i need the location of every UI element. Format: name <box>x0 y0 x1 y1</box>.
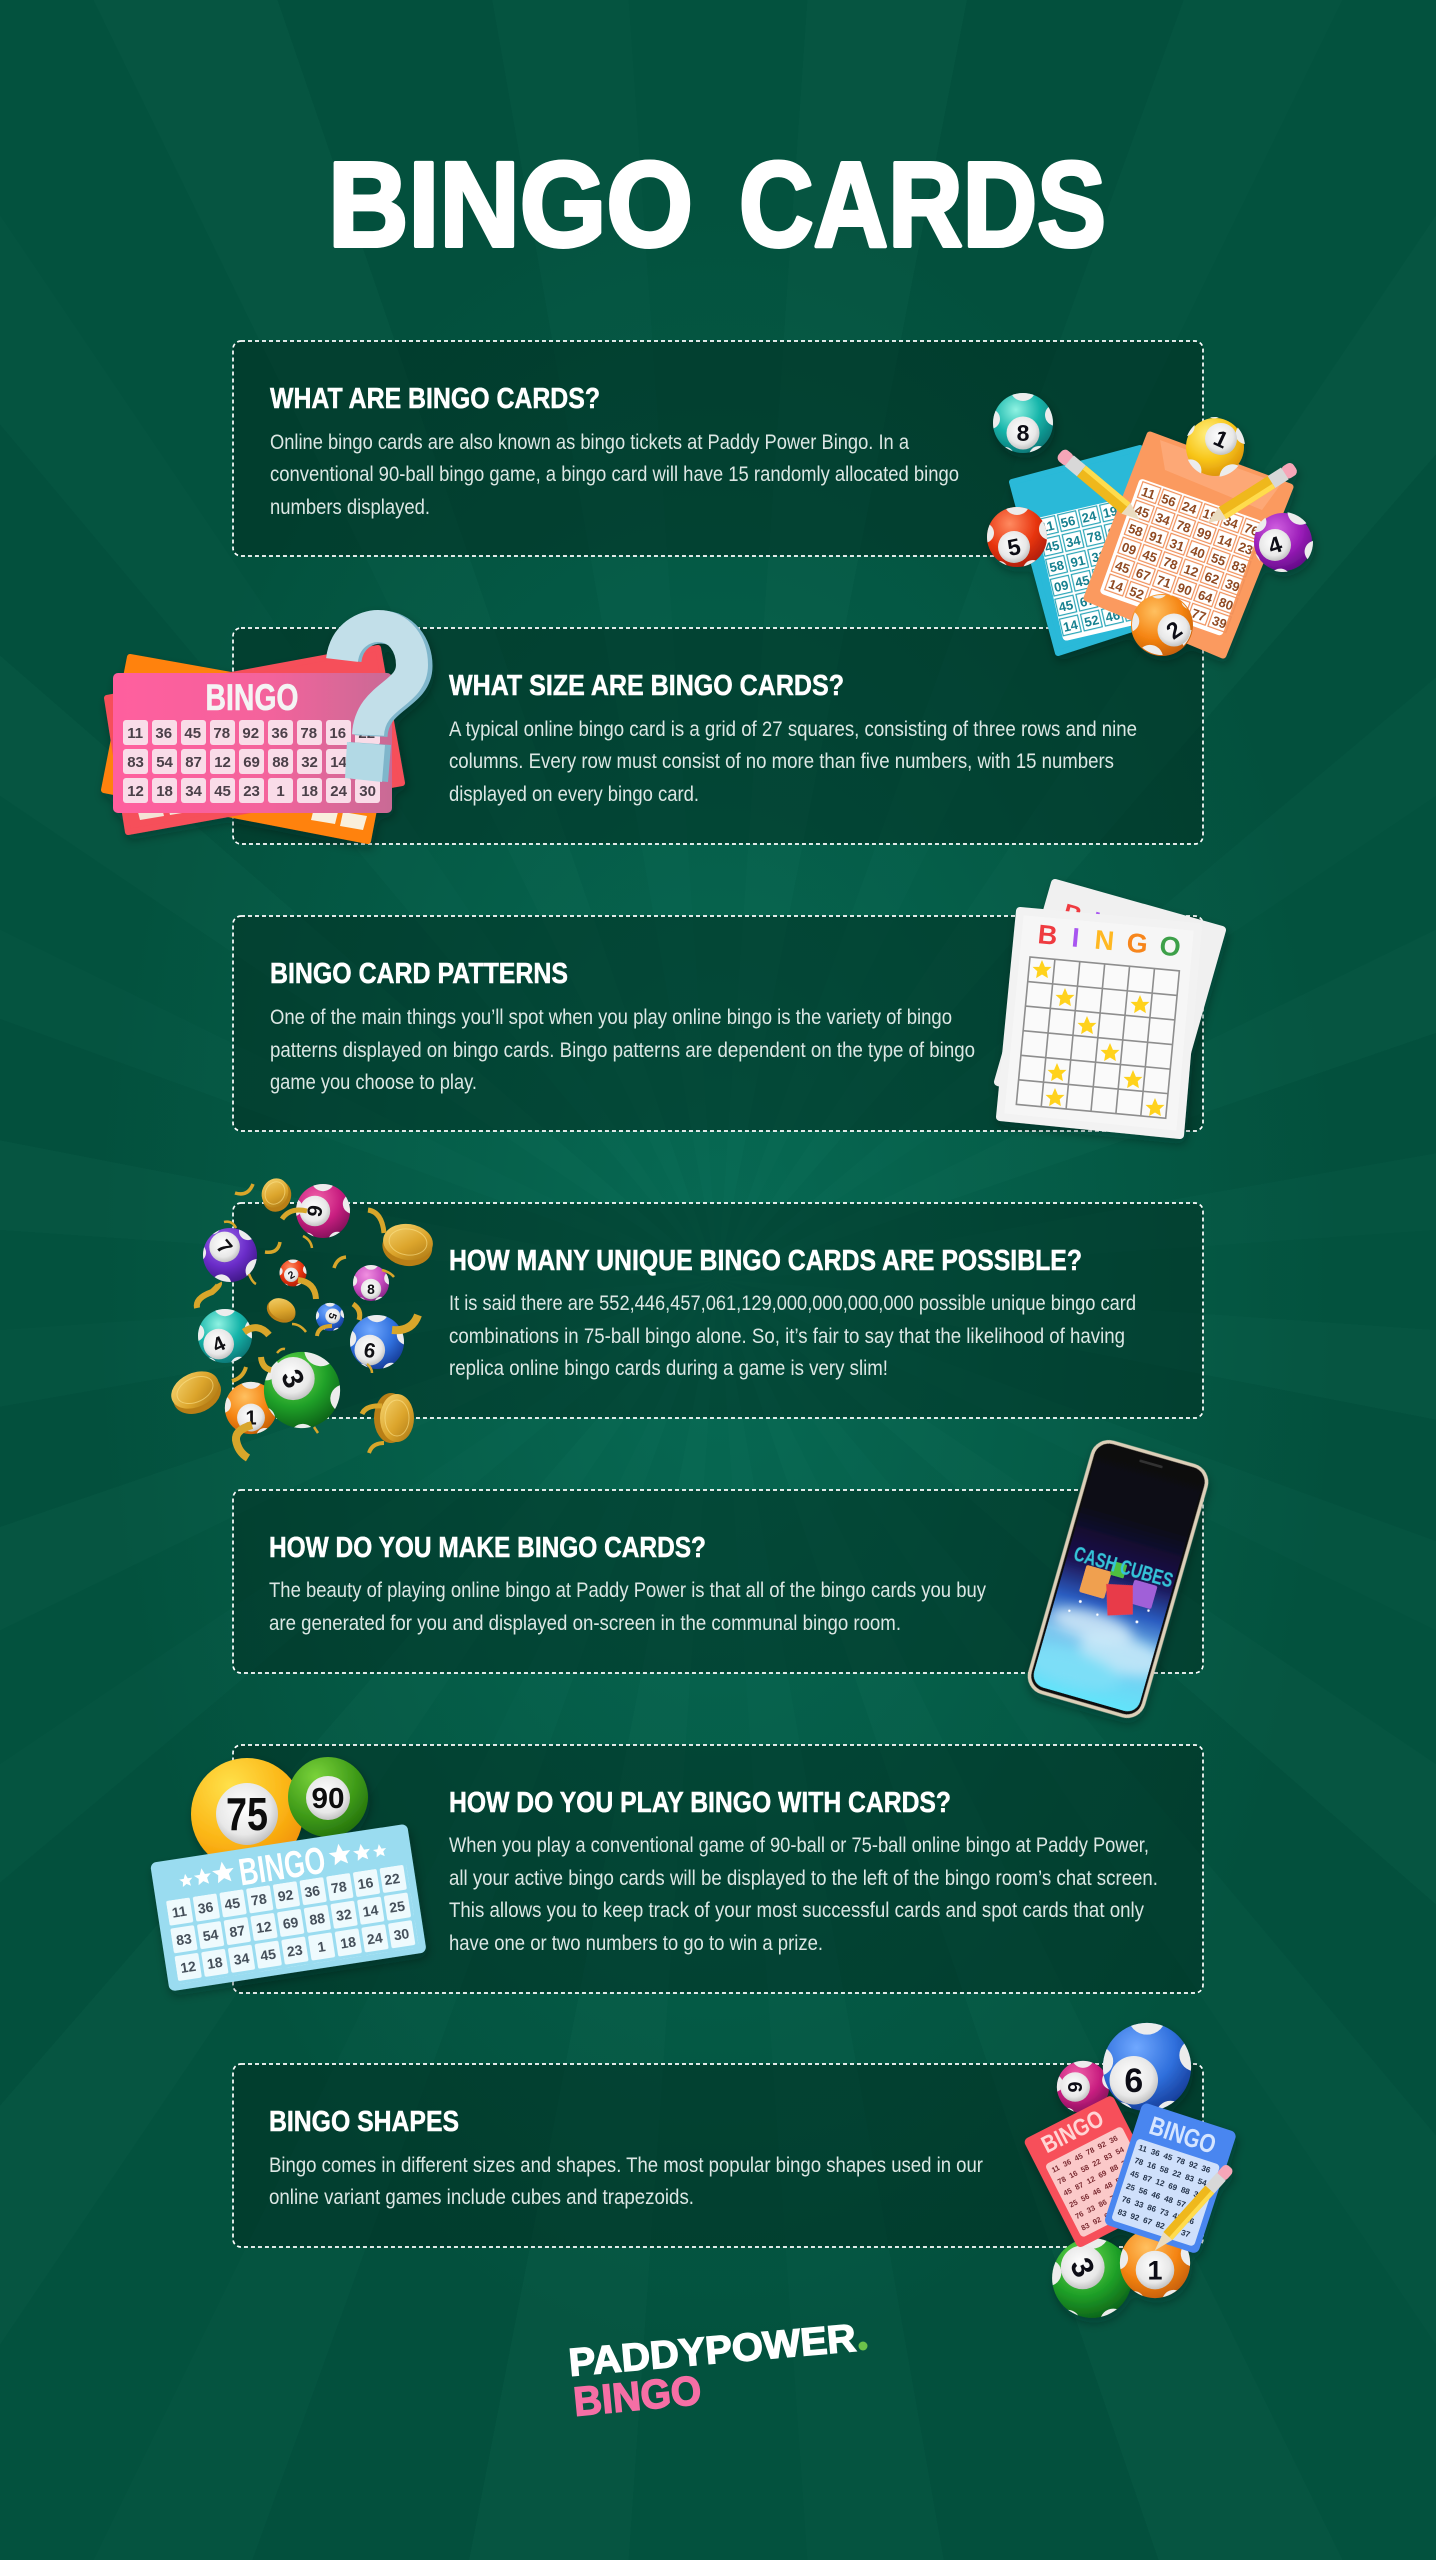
heading: bingo card patterns: BINGO CARD PATTERNS <box>270 958 568 990</box>
illustration: bingo shapes cards with balls and pencil: 1 <box>1148 2255 1163 2285</box>
body text: bingo shapes: online variant games include cubes and trapezoids. <box>269 2186 694 2209</box>
illustration: 75 and 90 balls with blue bingo card: BINGO <box>236 1840 328 1894</box>
panel: bingo card patterns <box>233 916 1203 1131</box>
illustration: white bingo pattern cards with stars: O <box>1158 931 1182 962</box>
body text: how do you play bingo with cards: all your active bingo cards will be displayed to the left of the bingo room’s chat screen. <box>449 1867 1158 1890</box>
illustration: bingo balls, gold coins and ribbons: 5 <box>325 1311 339 1321</box>
body text: what are bingo cards <box>270 431 959 519</box>
illustration: bingo shapes cards with balls and pencil <box>1023 1996 1237 2335</box>
body text: what size are bingo cards: A typical online bingo card is a grid of 27 squares, consisting of three rows and nine <box>449 718 1137 741</box>
illustration: bingo balls, gold coins and ribbons: 6 <box>302 1203 327 1219</box>
illustration: teal and orange bingo tickets with balls and pencils: 4 <box>1265 531 1285 559</box>
title <box>328 136 1106 272</box>
illustration: teal and orange bingo tickets with balls and pencils: 5 <box>1005 533 1023 561</box>
illustration: bingo shapes cards with balls and pencil: 3 <box>1063 2253 1101 2283</box>
illustration: teal and orange bingo tickets with balls and pencils: 45 34 78 99 <box>1043 523 1124 555</box>
illustration: pink bingo cards with question mark: 83 54 87 12 69 88 32 14 25 <box>127 754 376 771</box>
body text: bingo card patterns: patterns displayed on bingo cards. Bingo patterns are dependent on the type of bingo <box>270 1039 975 1062</box>
infographic canvas <box>101 160 1317 2416</box>
title: BINGO <box>328 136 693 272</box>
illustration: 75 and 90 balls with blue bingo card <box>150 1757 427 1992</box>
game logo: cash cubes: CASH CUBES <box>1071 1542 1176 1593</box>
illustration: bingo shapes cards with balls and pencil: 11 36 45 78 92 36 <box>1050 2133 1119 2175</box>
illustration: teal and orange bingo tickets with balls and pencils: 45 67 71 90 64 80 <box>1113 558 1235 613</box>
illustration: bingo shapes cards with balls and pencil: 45 87 12 69 88 32 <box>1129 2169 1204 2201</box>
body text: how many unique bingo cards: combinations in 75-ball bingo alone. So, it’s fair to say that the likelihood of having <box>449 1325 1125 1348</box>
illustration: teal and orange bingo tickets with balls and pencils: 11 56 24 19 <box>1039 503 1119 535</box>
panel: what are bingo cards <box>233 341 1203 556</box>
heading: how do you play bingo with cards: HOW DO YOU PLAY BINGO WITH CARDS? <box>449 1787 951 1819</box>
logo: Paddy Power Bingo <box>567 2317 868 2425</box>
body text: what are bingo cards: Online bingo cards are also known as bingo tickets at Paddy Power Bingo. In a <box>270 431 909 454</box>
body text: bingo shapes: Bingo comes in different sizes and shapes. The most popular bingo shapes used in our <box>269 2154 983 2177</box>
illustration: teal and orange bingo tickets with balls and pencils: 14 52 46 90 77 39 <box>1107 576 1229 632</box>
heading: what are bingo cards: WHAT ARE BINGO CARDS? <box>270 383 600 415</box>
illustration: bingo shapes cards with balls and pencil: 76 33 86 73 41 36 <box>1074 2180 1143 2221</box>
panel: bingo shapes <box>233 2064 1203 2247</box>
heading: how do you make bingo cards: HOW DO YOU MAKE BINGO CARDS? <box>269 1532 706 1564</box>
logo: Paddy Power Bingo: PADDYPOWER <box>567 2317 858 2385</box>
illustration: bingo balls, gold coins and ribbons: 2 <box>287 1269 297 1282</box>
illustration: teal and orange bingo tickets with balls and pencils: 45 34 78 99 14 23 <box>1133 502 1255 558</box>
illustration: smartphone with cash cubes game <box>1015 1435 1220 1723</box>
panel: how do you play bingo with cards <box>233 1745 1203 1993</box>
illustration: white bingo pattern cards with stars: I <box>1089 907 1103 936</box>
panel: what size are bingo cards <box>233 628 1203 844</box>
illustration: bingo shapes cards with balls and pencil: 25 56 46 48 57 14 <box>1125 2182 1200 2214</box>
illustration: 75 and 90 balls with blue bingo card: 90 <box>312 1783 344 1815</box>
illustration: bingo balls, gold coins and ribbons: 1 <box>245 1408 257 1430</box>
illustration: bingo shapes cards with balls and pencil: 78 16 58 22 83 54 <box>1056 2144 1126 2186</box>
illustration: teal and orange bingo tickets with balls and pencils: 09 45 78 12 62 39 <box>1120 539 1242 595</box>
illustration: bingo shapes cards with balls and pencil: 11 36 45 78 92 36 <box>1137 2143 1212 2175</box>
body text: what size are bingo cards: displayed on every bingo card. <box>449 783 699 806</box>
illustration: bingo shapes cards with balls and pencil: 76 33 86 73 41 36 <box>1121 2194 1196 2227</box>
illustration: 75 and 90 balls with blue bingo card: 75 <box>226 1788 268 1840</box>
body text: how many unique bingo cards: replica online bingo cards during a game is very slim! <box>449 1357 888 1380</box>
illustration: teal and orange bingo tickets with balls and pencils: 09 45 78 12 <box>1053 563 1133 595</box>
illustration: teal and orange bingo tickets with balls and pencils: 11 56 24 19 34 76 <box>1139 484 1261 539</box>
illustration: teal and orange bingo tickets with balls and pencils: 58 91 31 40 55 83 <box>1126 521 1248 576</box>
body text: how do you make bingo cards: The beauty of playing online bingo at Paddy Power is that all of the bingo cards you buy <box>269 1579 986 1602</box>
body text: what size are bingo cards <box>449 718 1137 806</box>
illustration: teal and orange bingo tickets with balls and pencils: 8 <box>1017 420 1030 446</box>
illustration: white bingo pattern cards with stars: N <box>1115 914 1140 946</box>
title: CARDS <box>739 136 1106 272</box>
heading: bingo shapes: BINGO SHAPES <box>269 2106 459 2138</box>
body text: how many unique bingo cards <box>449 1292 1136 1380</box>
illustration: bingo balls, gold coins and ribbons: 3 <box>274 1365 310 1393</box>
illustration: white bingo pattern cards with stars: G <box>1125 928 1149 959</box>
body text: what size are bingo cards: columns. Every row must consist of no more than five numbers, with 15 numbers <box>449 750 1114 773</box>
illustration: bingo shapes cards with balls and pencil: 83 92 67 82 24 37 <box>1117 2207 1192 2239</box>
illustration: pink bingo cards with question mark: BINGO <box>206 677 298 718</box>
illustration: pink bingo cards with question mark: 11 36 45 78 92 36 78 16 22 <box>127 725 375 742</box>
illustration: white bingo pattern cards with stars: B <box>1060 899 1085 930</box>
body text: how do you make bingo cards <box>269 1579 986 1635</box>
illustration: white bingo pattern cards with stars: N <box>1093 925 1116 956</box>
illustration: teal and orange bingo tickets with balls and pencils: 14 52 46 90 <box>1062 602 1143 635</box>
illustration: teal and orange bingo tickets with balls and pencils: 1 <box>1210 425 1232 454</box>
body text: how many unique bingo cards: It is said there are 552,446,457,061,129,000,000,000,000 possible unique bingo card <box>449 1292 1136 1315</box>
illustration: teal and orange bingo tickets with balls and pencils <box>974 375 1345 685</box>
illustration: white bingo pattern cards with stars <box>998 883 1222 1135</box>
body text: how do you play bingo with cards: This allows you to keep track of your most successful cards and spot cards that only <box>449 1899 1144 1922</box>
illustration: pink bingo cards with question mark <box>104 626 416 841</box>
illustration: bingo balls, gold coins and ribbons: 8 <box>367 1282 375 1297</box>
body text: bingo card patterns <box>270 1006 975 1094</box>
illustration: bingo balls, gold coins and ribbons: 4 <box>209 1332 230 1358</box>
illustration: teal and orange bingo tickets with balls and pencils: 45 67 71 90 <box>1057 582 1138 615</box>
game logo: cash cubes <box>1060 1542 1176 1630</box>
illustration: 75 and 90 balls with blue bingo card: 83 54 87 12 69 88 32 14 25 <box>175 1898 406 1948</box>
illustration: pink bingo cards with question mark: 12 18 34 45 23 1 18 24 30 <box>127 783 376 800</box>
illustration: bingo shapes cards with balls and pencil: BINGO <box>1146 2110 1220 2160</box>
illustration: bingo shapes cards with balls and pencil: 78 16 58 22 83 54 <box>1133 2156 1208 2188</box>
illustration: bingo shapes cards with balls and pencil: 6 <box>1063 2081 1085 2093</box>
body text: how do you play bingo with cards: When you play a conventional game of 90-ball or 75-ball online bingo at Paddy Power, <box>449 1834 1149 1857</box>
body text: how do you make bingo cards: are generated for you and displayed on-screen in the communal bingo room. <box>269 1612 901 1635</box>
heading: what size are bingo cards: WHAT SIZE ARE BINGO CARDS? <box>449 670 844 702</box>
illustration: teal and orange bingo tickets with balls and pencils: 58 91 31 40 <box>1048 543 1129 575</box>
body text: what are bingo cards: numbers displayed. <box>270 496 430 519</box>
illustration: bingo balls, gold coins and ribbons <box>165 1168 435 1463</box>
illustration: bingo balls, gold coins and ribbons: 7 <box>212 1236 237 1259</box>
illustration: white bingo pattern cards with stars: B <box>1037 919 1059 951</box>
body text: what are bingo cards: conventional 90-ball bingo game, a bingo card will have 15 randomly allocated bingo <box>270 463 959 486</box>
illustration: bingo shapes cards with balls and pencil: 6 <box>1124 2062 1143 2100</box>
illustration: white bingo pattern cards with stars: I <box>1070 922 1081 953</box>
illustration: teal and orange bingo tickets with balls and pencils: 2 <box>1161 616 1187 644</box>
body text: bingo card patterns: One of the main things you’ll spot when you play online bingo is the variety of bingo <box>270 1006 952 1029</box>
panel: how many unique bingo cards <box>233 1203 1203 1418</box>
illustration: bingo shapes cards with balls and pencil: 83 92 67 82 24 37 <box>1080 2191 1149 2233</box>
illustration: bingo balls, gold coins and ribbons: 6 <box>362 1338 377 1363</box>
illustration: bingo shapes cards with balls and pencil: 25 56 46 48 57 14 <box>1068 2168 1138 2209</box>
body text: bingo shapes <box>269 2154 983 2209</box>
body text: how do you play bingo with cards: have one or two numbers to go to win a prize. <box>449 1932 823 1955</box>
body text: how do you play bingo with cards <box>449 1834 1158 1955</box>
panel: how do you make bingo cards <box>233 1490 1203 1673</box>
illustration: 75 and 90 balls with blue bingo card: 11 36 45 78 92 36 78 16 22 <box>171 1870 401 1921</box>
heading: how many unique bingo cards: HOW MANY UNIQUE BINGO CARDS ARE POSSIBLE? <box>449 1245 1082 1277</box>
body text: bingo card patterns: game you choose to play. <box>270 1071 477 1094</box>
illustration: bingo shapes cards with balls and pencil: 45 87 12 69 88 32 <box>1062 2156 1131 2198</box>
illustration: 75 and 90 balls with blue bingo card: 12 18 34 45 23 1 18 24 30 <box>179 1925 411 1976</box>
logo: Paddy Power Bingo: BINGO <box>571 2367 703 2425</box>
illustration: bingo shapes cards with balls and pencil: BINGO <box>1037 2105 1108 2159</box>
